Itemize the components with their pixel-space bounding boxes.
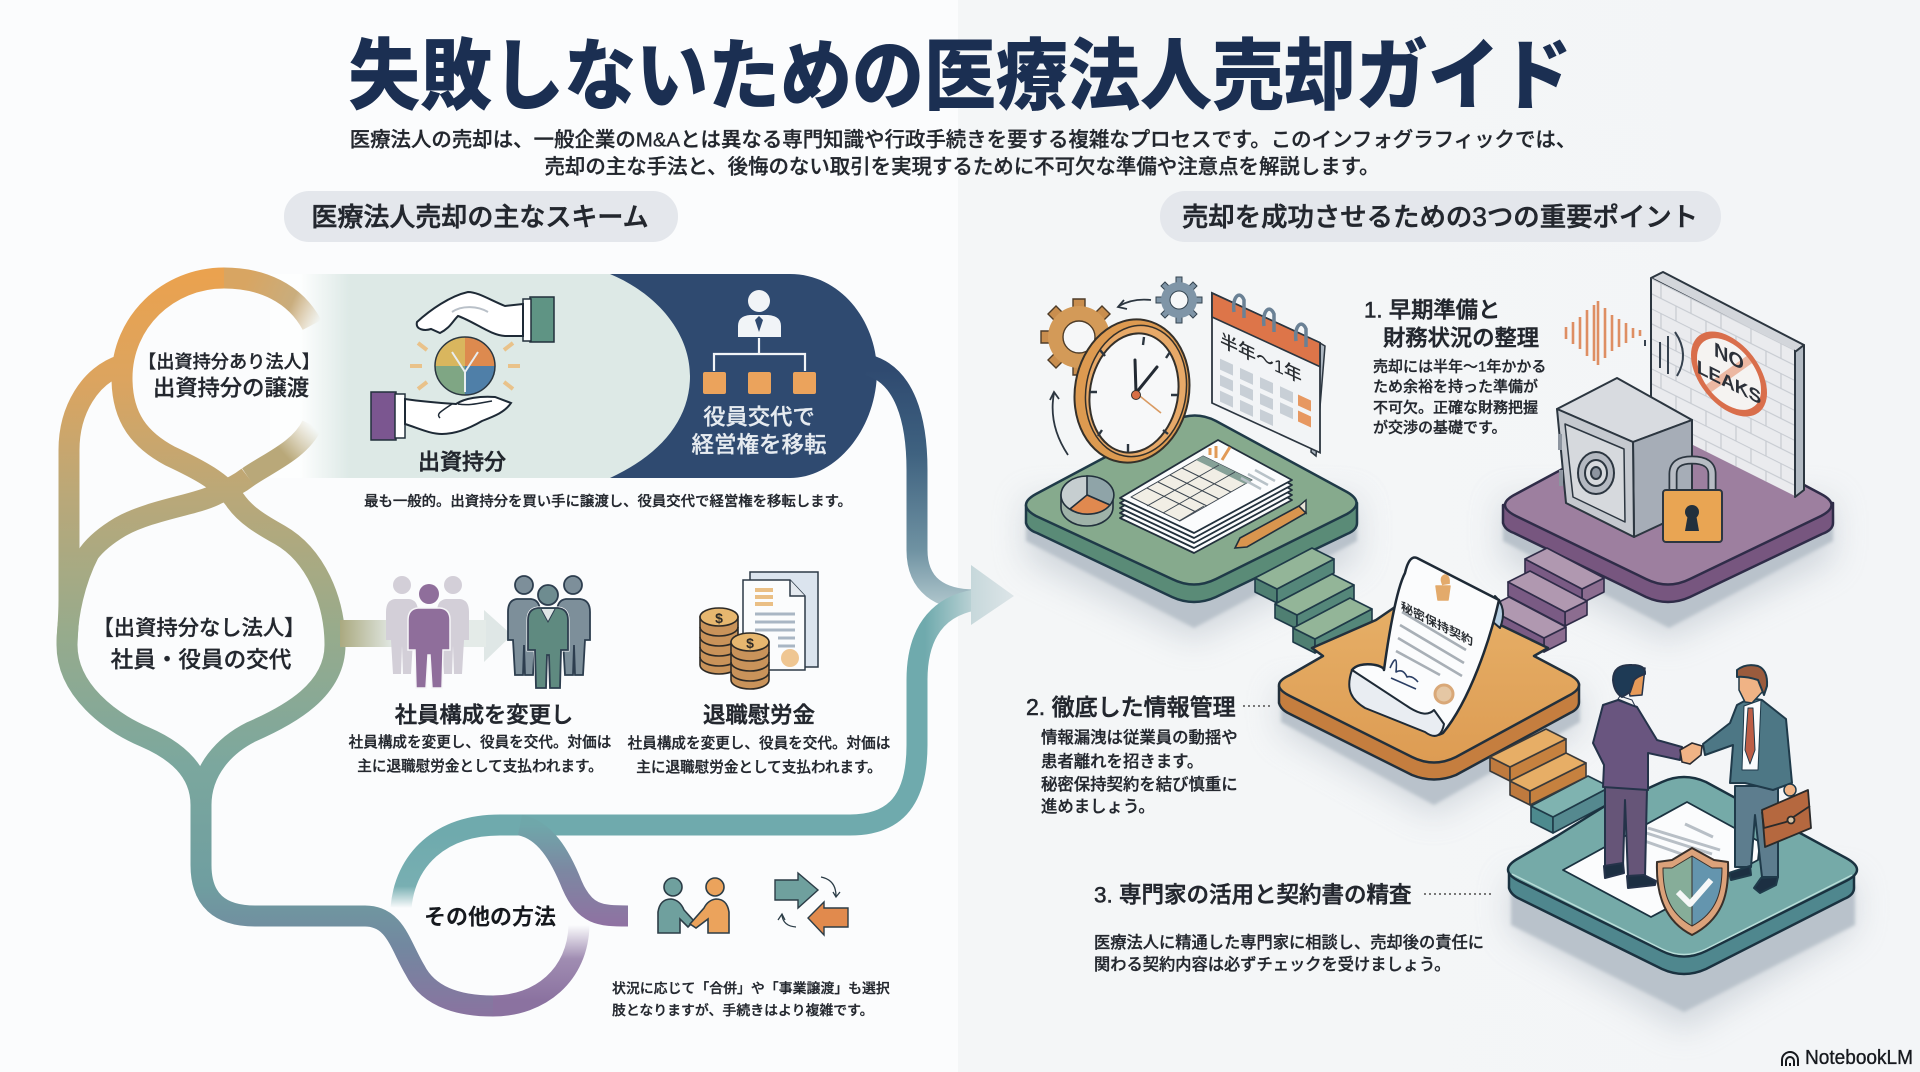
text: retirement bonus detail: 主に退職慰労金として支払われます。 [636,758,882,776]
text: point 2 [1026,694,1270,816]
icon: brick wall with no leaks sign [1651,272,1804,497]
icon: officer org chart [703,290,816,394]
icon: confidentiality contract scroll: 秘密保持契約 [1401,599,1473,649]
icon: pencil [1235,500,1306,548]
icon: briefcase [1762,790,1811,847]
icon: safe [1557,378,1692,537]
flow lines [67,278,975,1006]
node: equity holding corporation: 出資持分の譲渡 [153,376,309,400]
icon: merger handshake [658,878,729,933]
icon: brick wall with no leaks sign: LEAKS [1697,357,1761,409]
icon: members before [386,576,469,688]
icon: handshake [1680,743,1702,764]
label: retirement bonus: 退職慰労金 [703,702,815,728]
text: point 3: 3. 専門家の活用と契約書の精査 [1094,882,1412,908]
text: point 3: 関わる契約内容は必ずチェックを受けましょう。 [1094,955,1451,974]
node: non-equity corporation: 【出資持分なし法人】 [93,616,305,640]
platform: purple [1503,418,1833,628]
text: point 1: 不可欠。正確な財務把握 [1373,398,1538,416]
text: point 2: 患者離れを招きます。 [1041,753,1203,771]
label: equity: 出資持分 [418,450,506,474]
icon: clock and gears [1041,277,1202,472]
icon: confidentiality contract scroll [1349,558,1503,736]
text: retirement bonus detail [628,734,890,776]
stairs: purple [1487,548,1604,652]
icon: business transfer arrows [775,873,848,935]
figure: right businessman [1703,665,1796,893]
logo: NotebookLM: NotebookLM [1805,1047,1913,1069]
intro text [350,128,1576,178]
intro text: 売却の主な手法と、後悔のない取引を実現するために不可欠な準備や注意点を解説します。 [544,156,1380,178]
icon: calendar half a year to one year: 半年〜1年 [1220,330,1302,388]
icon: documents and coins: $ [715,610,723,626]
label: management transfer [691,404,827,458]
icon: paper on teal platform [1563,802,1760,917]
text: point 1: が交渉の基礎です。 [1373,418,1507,436]
figure: left businessman [1593,665,1682,888]
platform: orange [1279,587,1580,805]
stairs: orange [1490,729,1586,805]
icon: members after [508,576,590,688]
panel: key points illustration [1026,272,1857,1030]
text: point 2: 進めましょう。 [1041,798,1155,816]
node: equity holding corporation [138,352,320,400]
section heading: schemes [284,191,678,242]
section heading: key points [1160,191,1721,242]
title: 失敗しないための医療法人売却ガイド [348,32,1572,120]
text: member change detail: 主に退職慰労金として支払われます。 [357,757,603,775]
icon: documents and coins: $ [746,635,754,651]
node: non-equity corporation: 社員・役員の交代 [111,648,292,672]
text: other methods detail: 肢となりますが、手続きはより複雑です。 [612,1002,874,1018]
text: point 1 [1364,298,1546,436]
text: point 2: 情報漏洩は従業員の動揺や [1041,729,1238,747]
node: other methods: その他の方法 [424,904,556,930]
text: point 1: 1. 早期準備と [1364,298,1500,322]
section heading: key points: 売却を成功させるための3つの重要ポイント [1182,202,1698,232]
icon: shield with check [1657,848,1728,935]
text: point 2: 2. 徹底した情報管理 [1026,694,1236,720]
arrow: member change [340,610,512,662]
text: retirement bonus detail: 社員構成を変更し、役員を交代。対価は [628,734,890,752]
icon: hands holding equity sphere [371,292,554,440]
icon: financial documents [1120,440,1292,553]
text: other methods detail [612,980,890,1018]
icon: documents and coins [700,572,818,689]
label: management transfer: 役員交代で [703,404,815,430]
caption: equity transfer: 最も一般的。出資持分を買い手に譲渡し、役員交代で経営権を移転します。 [364,493,852,510]
soft shadows [1026,500,1854,1030]
text: point 3 [1094,882,1494,974]
text: point 1: 売却には半年〜1年かかる [1373,358,1546,376]
stairs: green [1255,548,1372,653]
label: change members: 社員構成を変更し [395,702,573,728]
section heading: schemes: 医療法人売却の主なスキーム [311,202,649,232]
icon: calendar half a year to one year [1212,293,1325,456]
text: point 1: 財務状況の整理 [1383,326,1539,350]
icon: brick wall with no leaks sign: NO [1714,339,1744,375]
icon: padlock [1663,460,1722,542]
platform: teal [1508,776,1857,1012]
text: point 3: 医療法人に精通した専門家に相談し、売却後の責任に [1094,934,1484,952]
text: other methods detail: 状況に応じて「合併」や「事業譲渡」も選択 [612,980,890,996]
label: management transfer: 経営権を移転 [691,432,827,458]
platform: green [1026,416,1357,628]
band: navy management change [610,274,877,478]
icon: arrow to key points [971,565,1014,625]
node: non-equity corporation [93,616,305,672]
panel: schemes flow [67,274,1014,1018]
icon: pie chart [1061,476,1114,526]
node: equity holding corporation: 【出資持分あり法人】 [138,352,320,372]
text: point 2: 秘密保持契約を結び慎重に [1041,776,1238,794]
band: equity transfer [270,274,690,478]
text: member change detail: 社員構成を変更し、役員を交代。対価は [349,733,611,751]
text: member change detail [349,733,611,775]
text: point 1: ため余裕を持った準備が [1373,378,1538,396]
icon: sound waves [1566,301,1683,376]
intro text: 医療法人の売却は、一般企業のM&Aとは異なる専門知識や行政手続きを要する複雑なプロセスです。このインフォグラフィックでは、 [350,128,1576,152]
